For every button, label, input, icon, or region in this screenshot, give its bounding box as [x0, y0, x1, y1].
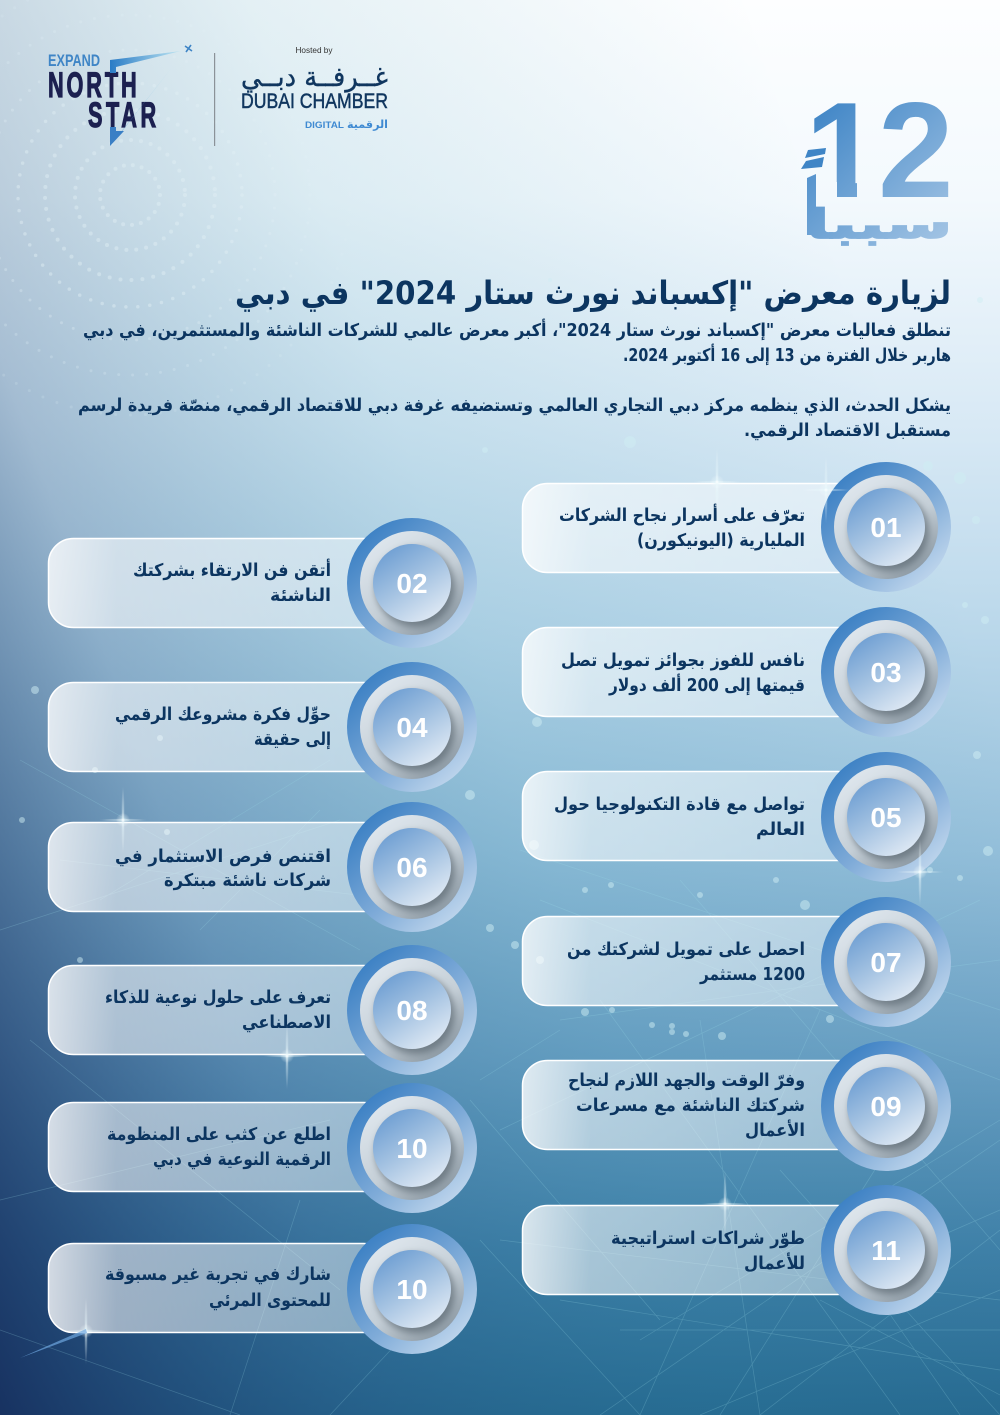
item 08: [48, 945, 477, 1075]
number badge: 05: [870, 802, 902, 833]
network lines decoration: [0, 760, 1000, 1415]
reason text: طوّر شراكات استراتيجية: [611, 1229, 805, 1249]
card: [522, 628, 862, 716]
number badge: 04: [396, 712, 428, 743]
number badge: [347, 802, 477, 932]
reason text: شركات ناشئة مبتكرة: [164, 871, 331, 891]
tanween strokes: [801, 148, 826, 169]
item 05: [522, 752, 951, 882]
number badge: [821, 1185, 951, 1315]
item 04: [48, 662, 477, 792]
reason text: تعرف على حلول نوعية للذكاء: [105, 988, 331, 1008]
intro paragraph 1: تنطلق فعاليات معرض "إكسباند نورث ستار 2024"، أكبر معرض عالمي للشركات الناشئة والمستثمرين، في دبي: [83, 319, 951, 341]
number badge: [821, 752, 951, 882]
logo wordmark EXPAND: EXPAND: [48, 52, 100, 70]
number badge: [821, 1041, 951, 1171]
logo star mark: [110, 45, 192, 146]
logo: Dubai Chamber: [241, 46, 388, 131]
card: [48, 538, 388, 628]
number badge: 06: [396, 852, 428, 883]
item 02: [48, 518, 477, 648]
number badge: 03: [870, 657, 902, 688]
item 12 (numbered 10 in source): [48, 1224, 477, 1354]
card: [48, 682, 388, 772]
reason text: اقتنص فرص الاستثمار في: [115, 847, 331, 867]
number badge: [347, 518, 477, 648]
reason text: [105, 1265, 331, 1311]
logo wordmark STAR: STAR: [88, 97, 156, 135]
reason text: الناشئة: [270, 586, 331, 606]
intro paragraph 2: [78, 396, 951, 441]
card: [522, 484, 862, 572]
item 10: [48, 1083, 477, 1213]
intro paragraph 2: مستقبل الاقتصاد الرقمي.: [744, 421, 951, 441]
number badge: [347, 945, 477, 1075]
reason text: نافس للفوز بجوائز تمويل تصل: [561, 651, 805, 671]
card: [522, 772, 862, 860]
reason text: 1200 مستثمر: [699, 965, 805, 985]
item 03: [522, 607, 951, 737]
logo: Expand North Star: [48, 45, 192, 146]
card: [522, 1206, 862, 1294]
number badge: [347, 1083, 477, 1213]
reason text: إلى حقيقة: [254, 730, 331, 750]
reason text: [567, 940, 805, 985]
logo wordmark NORTH: NORTH: [48, 67, 137, 105]
reason text: شركتك الناشئة مع مسرعات: [576, 1096, 805, 1116]
word reasons: سببا: [806, 202, 952, 248]
reason text: احصل على تمويل لشركتك من: [567, 940, 805, 960]
reason text: قيمتها إلى 200 ألف دولار: [608, 674, 805, 696]
hosted by label: Hosted by: [296, 46, 332, 55]
alef stem: [807, 174, 816, 235]
card: [522, 1060, 862, 1150]
sparkles: [20, 448, 944, 1365]
reason text: اطلع عن كثب على المنظومة: [107, 1125, 331, 1145]
number badge: 07: [870, 947, 902, 978]
number badge: [821, 462, 951, 592]
reason text: للمحتوى المرئي: [209, 1291, 331, 1311]
reason text: وفرّ الوقت والجهد اللازم لنجاح: [568, 1071, 805, 1091]
item 09: [522, 1041, 951, 1171]
intro paragraph 1: هاربر خلال الفترة من 13 إلى 16 أكتوبر 2024.: [623, 344, 951, 366]
number badge: [347, 1224, 477, 1354]
reason text: [611, 1229, 805, 1274]
reason text: [559, 504, 805, 551]
reason text: [115, 705, 331, 750]
headline number: 12 reasons: [801, 102, 948, 246]
dotted rings decoration: [0, 0, 350, 415]
reason text: أتقن فن الارتقاء بشركتك: [133, 559, 331, 581]
reason text: [568, 1071, 805, 1141]
reason text: [107, 1125, 331, 1170]
reason text: حوِّل فكرة مشروعك الرقمي: [115, 705, 331, 725]
number badge: [821, 607, 951, 737]
logo divider: [214, 53, 215, 146]
reason text: الأعمال: [745, 1119, 805, 1141]
reason text: [105, 988, 331, 1033]
number badge: [347, 662, 477, 792]
card: [48, 1244, 388, 1332]
reason text: [554, 795, 805, 840]
reason text: الرقمية النوعية في دبي: [153, 1150, 331, 1170]
intro paragraph 1: [83, 319, 951, 366]
title: لزيارة معرض "إكسباند نورث ستار 2024" في دبي: [235, 274, 951, 313]
number badge: 10: [396, 1274, 428, 1305]
reason text: للأعمال: [744, 1252, 805, 1274]
item 01: [522, 462, 951, 592]
item 06: [48, 802, 477, 932]
number badge: 01: [870, 512, 902, 543]
English name: DUBAI CHAMBER: [241, 90, 388, 113]
number badge: 02: [396, 568, 428, 599]
reason text: تواصل مع قادة التكنولوجيا حول: [554, 795, 805, 815]
reason text: [561, 651, 805, 696]
number badge: 09: [870, 1091, 902, 1122]
reason text: الاصطناعي: [242, 1013, 331, 1033]
reason text: العالم: [756, 820, 805, 840]
number badge: 08: [396, 995, 428, 1026]
reason text: شارك في تجربة غير مسبوقة: [105, 1265, 331, 1285]
card: [48, 1102, 388, 1192]
digital label arabic: الرقمية: [347, 118, 388, 131]
reason text: تعرّف على أسرار نجاح الشركات: [559, 504, 805, 526]
number 12: 12: [805, 74, 954, 226]
card: [48, 966, 388, 1054]
number badge: 11: [871, 1235, 901, 1266]
item 11: [522, 1185, 951, 1315]
number badge: [821, 897, 951, 1027]
reason text: [133, 559, 331, 606]
number badge: 10: [396, 1133, 428, 1164]
card: [522, 916, 862, 1006]
floating dots decoration: [19, 278, 993, 1040]
reason text: المليارية (اليونيكورن): [637, 531, 805, 551]
reason text: [115, 847, 331, 891]
Arabic name: غــرفــة دبــي: [241, 62, 388, 93]
digital label: DIGITAL: [305, 120, 344, 131]
item 07: [522, 897, 951, 1027]
card: [48, 822, 388, 912]
